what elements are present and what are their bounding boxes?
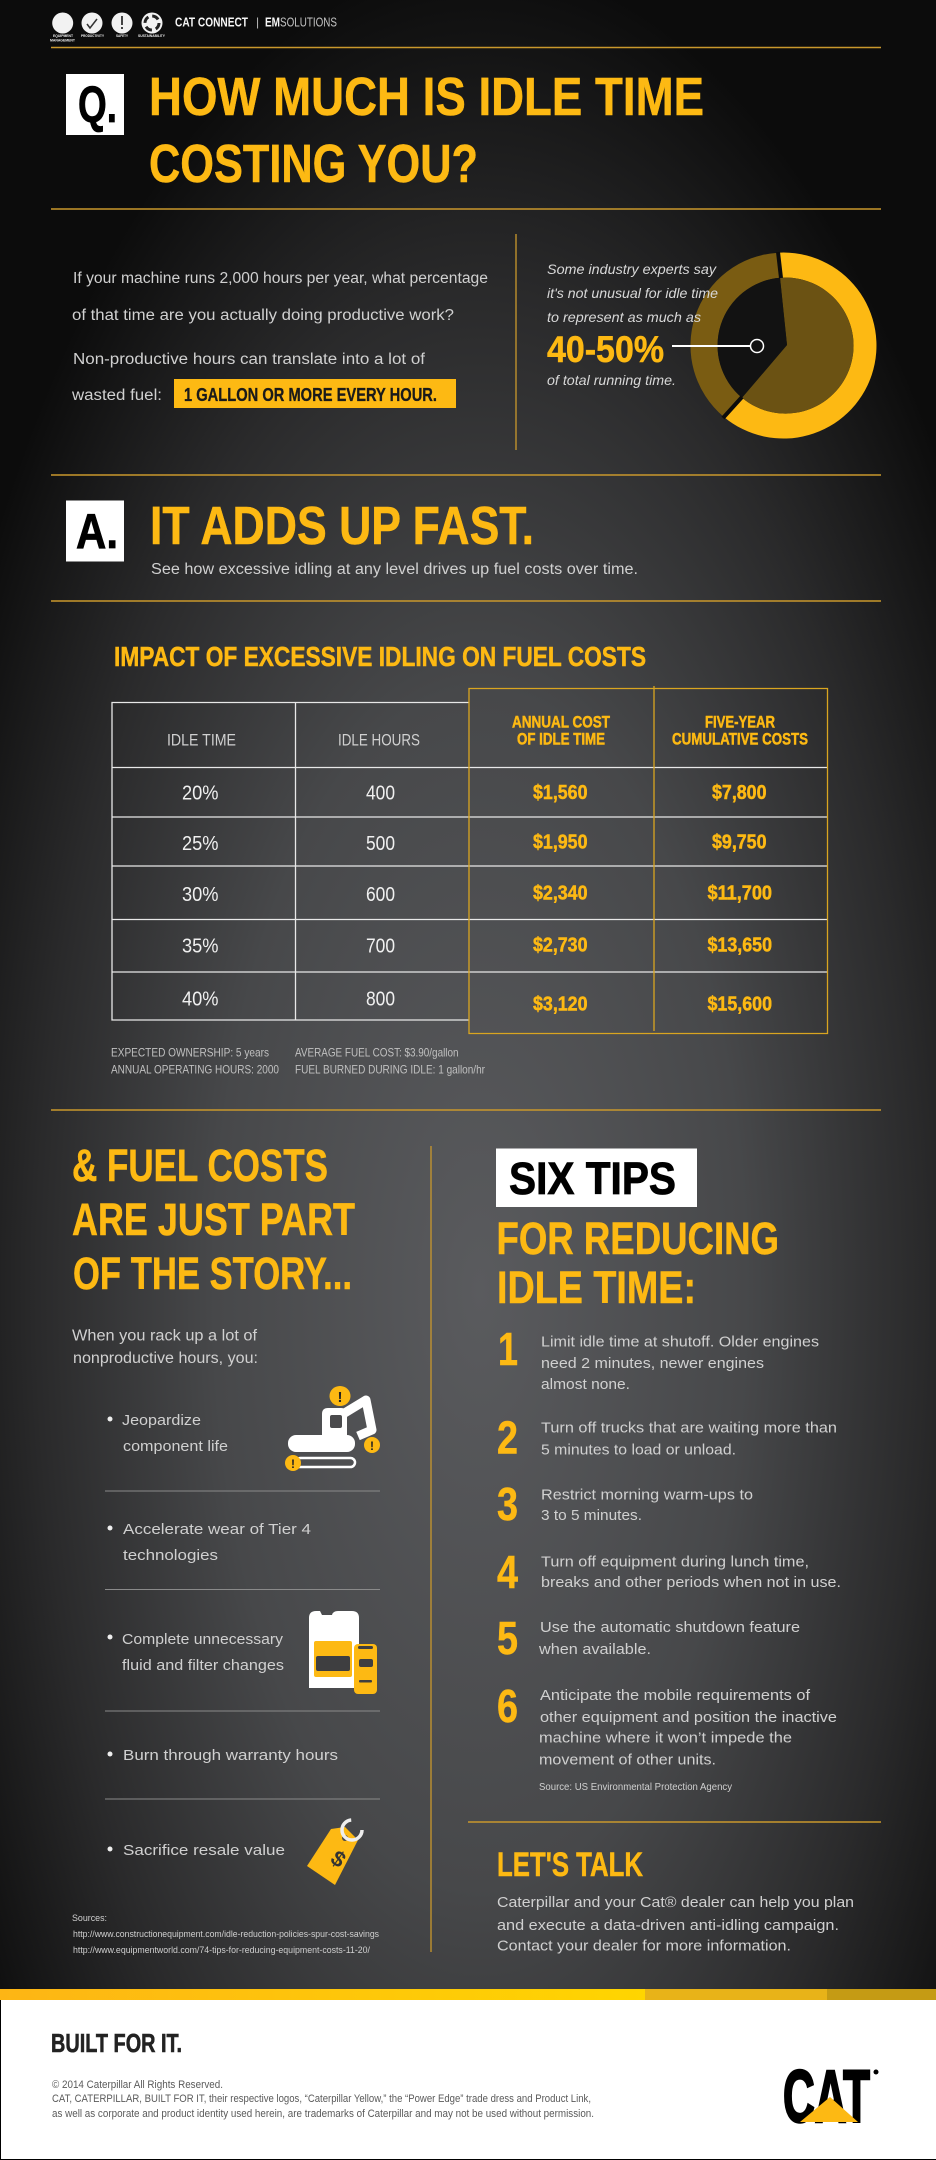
heading: just part of the story (72, 1140, 355, 1299)
text block: productive work question: wasted fuel: (71, 387, 162, 404)
title: how much is idle time costing you (149, 68, 704, 194)
table values: idle time and hours: 35% (182, 936, 219, 958)
bullet: jeopardize component life: Jeopardize (122, 1412, 201, 1429)
CAT logo: CAT (783, 2055, 870, 2138)
text block: industry experts quote: 40-50% (547, 329, 664, 370)
tip 5: 5 (497, 1612, 518, 1664)
sources: http://www.equipmentworld.com/74-tips-for-reducing-equipment-costs-11-20/ (73, 1945, 370, 1956)
tip 6: other equipment and position the inactive (540, 1710, 837, 1726)
table notes (111, 1046, 485, 1076)
heading: just part of the story: & FUEL COSTS (72, 1140, 328, 1191)
bullet: jeopardize component life: component life (123, 1438, 228, 1455)
tip 3: 3 (497, 1478, 518, 1530)
table values: costs: $7,800 (712, 782, 766, 804)
tip 6 (497, 1680, 837, 1768)
text block: productive work question: of that time are you actually doing productive work? (72, 307, 454, 324)
table values: costs: $2,340 (533, 882, 588, 904)
table values: idle time and hours: 30% (182, 884, 219, 906)
table values: idle time and hours: 25% (182, 833, 219, 855)
heading: table title: IMPACT OF EXCESSIVE IDLING ON FUEL COSTS (114, 641, 646, 672)
text block: industry experts quote: of total running time. (547, 372, 676, 388)
text block: industry experts quote: it's not unusual for idle time (547, 285, 718, 301)
table values: idle time and hours: 800 (366, 988, 395, 1010)
icon: excavator with warnings: ! (291, 1457, 295, 1471)
table header: OF IDLE TIME (517, 730, 605, 748)
intro text (72, 1328, 258, 1367)
bullet: accelerate wear (108, 1521, 311, 1564)
text block: industry experts quote (547, 261, 718, 388)
heading: for reducing idle time: IDLE TIME: (497, 1262, 696, 1313)
tip 2 (497, 1412, 837, 1464)
tip 4: breaks and other periods when not in use. (541, 1575, 841, 1591)
heading: for reducing idle time: FOR REDUCING (496, 1213, 779, 1264)
tip 3 (497, 1478, 753, 1530)
title: how much is idle time costing you: COSTING YOU? (149, 135, 478, 194)
bullet: fluid and filter changes (108, 1631, 284, 1674)
tip 2: 5 minutes to load or unload. (541, 1443, 736, 1459)
Cat Connect EM Solutions wordmark (175, 14, 337, 30)
icon: equipment management: EQUIPMENT (53, 33, 73, 38)
table header: CUMULATIVE COSTS (672, 730, 808, 748)
Cat Connect EM Solutions wordmark: | (256, 15, 259, 29)
badge: Q: Q. (78, 76, 117, 133)
footer tagline: BUILT FOR IT. (51, 2028, 182, 2058)
legal text: © 2014 Caterpillar All Rights Reserved. (52, 2079, 223, 2091)
tip 4: 4 (497, 1546, 518, 1598)
table values: idle time and hours (182, 782, 395, 1010)
panel: let's talk: Contact your dealer for more information. (497, 1938, 791, 1954)
badge: Q (66, 74, 124, 135)
text block: industry experts quote: to represent as much as (547, 309, 701, 325)
bullet: fluid and filter changes: Complete unnecessary (122, 1631, 284, 1648)
tip 4: Turn off equipment during lunch time, (541, 1554, 809, 1570)
bullet: jeopardize component life (108, 1412, 228, 1455)
callout: 1 gallon or more every hour: 1 GALLON OR MORE EVERY HOUR. (184, 385, 437, 405)
tip 1 (498, 1323, 819, 1393)
footer (0, 2000, 936, 2160)
panel: let's talk: LET'S TALK (497, 1846, 643, 1884)
table notes: ANNUAL OPERATING HOURS: 2000 (111, 1062, 279, 1076)
heading: it adds up fast: See how excessive idling at any level drives up fuel costs over time. (151, 561, 638, 578)
header: Cat Connect logos (50, 12, 337, 42)
intro text: nonproductive hours, you: (73, 1350, 258, 1367)
bullet: warranty hours: Burn through warranty hours (123, 1747, 338, 1764)
heading: it adds up fast (150, 496, 638, 578)
legal text (52, 2079, 594, 2120)
tip 5: Use the automatic shutdown feature (540, 1620, 800, 1636)
icon: fluid jug and filter can (309, 1611, 377, 1694)
bullet: accelerate wear: technologies (123, 1547, 218, 1564)
tip 2: 2 (497, 1412, 518, 1464)
table values: costs: $11,700 (708, 882, 772, 904)
table values: costs: $3,120 (533, 994, 588, 1016)
table values: idle time and hours: 700 (366, 936, 395, 958)
table header (167, 712, 808, 750)
icon: price tag: $ (326, 1845, 350, 1873)
panel: six tips (496, 1148, 841, 1793)
Cat Connect EM Solutions wordmark: CAT CONNECT (175, 14, 248, 30)
icon: productivity: PRODUCTIVITY (81, 33, 104, 38)
donut chart: idle share of running time (690, 252, 876, 439)
icon: price tag (307, 1820, 362, 1885)
tip 2: Turn off trucks that are waiting more than (541, 1421, 837, 1437)
table values: costs: $13,650 (708, 934, 772, 956)
icon: safety: SAFETY (116, 33, 128, 38)
table notes: FUEL BURNED DURING IDLE: 1 gallon/hr (295, 1062, 485, 1076)
text block: industry experts quote: Some industry experts say (547, 261, 717, 277)
heading: just part of the story: OF THE STORY... (73, 1248, 352, 1299)
bullet: fluid and filter changes: fluid and filter changes (122, 1657, 284, 1674)
callout pointer (672, 340, 764, 352)
Cat Connect EM Solutions wordmark: SOLUTIONS (280, 14, 337, 30)
tip 1: 1 (498, 1323, 518, 1375)
table header: FIVE-YEAR (705, 712, 775, 732)
tip 6: movement of other units. (539, 1752, 716, 1768)
heading: just part of the story: ARE JUST PART (72, 1194, 355, 1245)
tip 3: 3 to 5 minutes. (541, 1508, 642, 1524)
tip 3: Restrict morning warm-ups to (541, 1488, 753, 1504)
table values: costs: $15,600 (708, 994, 772, 1016)
callout: 1 gallon or more every hour (174, 379, 456, 408)
heading: it adds up fast: IT ADDS UP FAST. (150, 496, 534, 556)
icon: excavator with warnings: ! (370, 1439, 374, 1453)
yellow footer band (0, 1989, 936, 2000)
tip 6: Anticipate the mobile requirements of (540, 1688, 811, 1704)
table values: idle time and hours: 400 (366, 782, 395, 804)
Cat Connect EM Solutions wordmark: EM (265, 14, 280, 30)
text block: productive work question: Non-productive hours can translate into a lot of (73, 351, 426, 368)
icon: excavator with warnings (285, 1386, 380, 1471)
panel: let's talk: and execute a data-driven anti-idling campaign. (497, 1917, 839, 1934)
title: how much is idle time costing you: HOW MUCH IS IDLE TIME (149, 68, 704, 127)
table: impact of idling on fuel costs (112, 686, 828, 1034)
table values: idle time and hours: 600 (366, 884, 395, 906)
heading: six tips badge: SIX TIPS (509, 1153, 676, 1204)
icon: sustainability (138, 12, 165, 38)
table header: IDLE HOURS (338, 730, 420, 750)
table values: costs: $9,750 (712, 832, 766, 854)
icon: excavator with warnings: ! (338, 1389, 342, 1406)
bullet: accelerate wear: Accelerate wear of Tier 4 (123, 1521, 311, 1538)
badge: A: A. (76, 505, 118, 559)
table values: idle time and hours: 20% (182, 782, 219, 804)
tip 4 (497, 1546, 841, 1598)
legal text: CAT, CATERPILLAR, BUILT FOR IT, their respective logos, “Caterpillar Yellow,” the “Power Edge” trade dress and Product Link, (52, 2093, 591, 2105)
tip 6: 6 (497, 1680, 518, 1732)
table header: ANNUAL COST (512, 712, 610, 732)
heading: for reducing idle time (496, 1213, 779, 1313)
tip 1: almost none. (541, 1377, 630, 1393)
icon: equipment management: MANAGEMENT (50, 38, 75, 42)
sources (72, 1913, 379, 1956)
panel: fuel costs are just part of the story (72, 1140, 380, 1956)
table values: costs: $1,950 (533, 832, 588, 854)
table values: costs: $2,730 (533, 934, 588, 956)
tip 5 (497, 1612, 800, 1664)
table values: costs (533, 782, 772, 1016)
panel: let's talk (497, 1846, 854, 1954)
table values: idle time and hours: 500 (366, 833, 395, 855)
icon: productivity (81, 12, 104, 38)
table notes: EXPECTED OWNERSHIP: 5 years (111, 1046, 269, 1060)
tip 1: need 2 minutes, newer engines (541, 1356, 764, 1372)
text block: productive work question: If your machine runs 2,000 hours per year, what percentage (73, 270, 488, 287)
icon: sustainability: SUSTAINABILITY (138, 33, 165, 38)
tip 5: when available. (538, 1642, 651, 1658)
table notes: AVERAGE FUEL COST: $3.90/gallon (295, 1046, 458, 1060)
text block: productive work question (71, 270, 488, 404)
table header: IDLE TIME (167, 730, 236, 750)
intro text: When you rack up a lot of (72, 1328, 258, 1344)
icon: safety (112, 12, 132, 38)
sources: Sources: (72, 1913, 107, 1924)
tip 6: machine where it won’t impede the (539, 1731, 792, 1747)
tip 1: Limit idle time at shutoff. Older engines (541, 1334, 819, 1350)
sources: http://www.constructionequipment.com/idle-reduction-policies-spur-cost-savings (73, 1929, 379, 1940)
panel: let's talk: Caterpillar and your Cat® dealer can help you plan (497, 1894, 854, 1911)
bullet: resale value: Sacrifice resale value (123, 1842, 285, 1859)
table values: idle time and hours: 40% (182, 988, 219, 1010)
table values: costs: $1,560 (533, 782, 588, 804)
legal text: as well as corporate and product identity used herein, are trademarks of Caterpillar and may not be used without permission. (52, 2108, 594, 2120)
icon: equipment management (50, 12, 75, 42)
CAT logo (783, 2055, 878, 2138)
tips source: Source: US Environmental Protection Agency (539, 1782, 732, 1793)
